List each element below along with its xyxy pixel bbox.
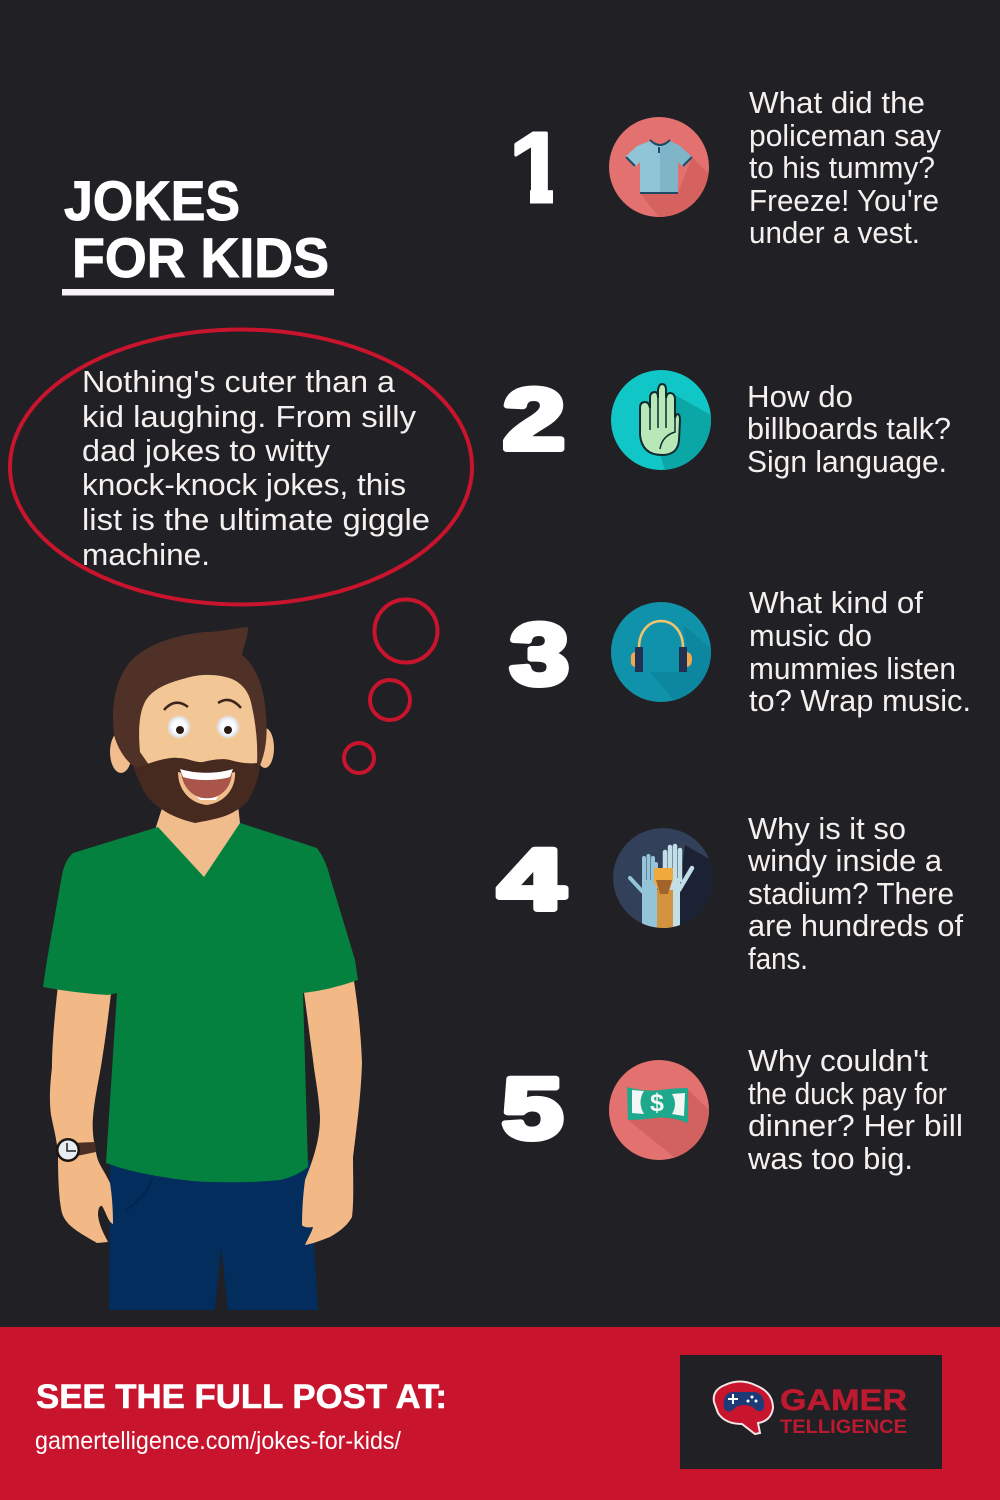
icon: raised hands [613, 828, 713, 928]
logo wordmark: GAMER [780, 1384, 907, 1417]
joke text 5: Why couldn't [748, 1043, 928, 1078]
joke text 4: are hundreds of [748, 908, 963, 943]
eyes [167, 715, 240, 739]
title: JOKES [64, 169, 240, 232]
joke text 1: policeman say [749, 118, 941, 153]
joke 5 [502, 1043, 963, 1176]
eyebrows [164, 700, 241, 710]
neck [155, 805, 241, 880]
footer url: gamertelligence.com/jokes-for-kids/ [35, 1427, 401, 1455]
joke text 4: stadium? There [748, 876, 954, 911]
joke text 2: Sign language. [747, 444, 947, 479]
joke text 2: How do [747, 379, 853, 414]
joke text 1: What did the [749, 85, 925, 120]
green shirt [43, 823, 358, 1182]
joke text 4: fans. [748, 941, 808, 976]
icon: dollar bill: $ [650, 1089, 664, 1117]
logo [680, 1355, 942, 1469]
joke text 5 [747, 1043, 963, 1176]
joke text 5: the duck pay for [748, 1076, 947, 1111]
number 1: 1 [509, 112, 565, 224]
joke 4 [498, 811, 963, 976]
hair [113, 627, 267, 770]
joke text 4: Why is it so [748, 811, 906, 846]
thought bubble with intro text: knock-knock jokes, this [82, 467, 406, 502]
joke text 3: to? Wrap music. [749, 683, 971, 718]
joke text 1: to his tummy? [749, 150, 935, 185]
thought bubble trail circles [344, 600, 438, 773]
ears [110, 728, 274, 773]
beard [133, 758, 260, 823]
face [139, 675, 257, 795]
number 2: 2 [503, 372, 565, 468]
wristwatch [56, 1138, 96, 1162]
joke text 5: dinner? Her bill [748, 1108, 963, 1143]
joke text 2: billboards talk? [747, 411, 951, 446]
mouth [178, 769, 235, 805]
thought bubble with intro text: kid laughing. From silly [82, 399, 417, 434]
thought bubble with intro text: Nothing's cuter than a [82, 364, 396, 399]
icon: headphones [611, 602, 711, 702]
title: FOR KIDS [72, 226, 329, 289]
joke text 3: What kind of [749, 585, 923, 620]
left arm [50, 985, 113, 1243]
joke text 5: was too big. [747, 1141, 913, 1176]
thought bubble with intro text: machine. [82, 537, 210, 572]
illustration: laughing man [43, 627, 362, 1310]
joke 2 [503, 370, 951, 480]
thought bubble with intro text [10, 330, 472, 604]
icon: raised hand [611, 370, 711, 470]
number 4: 4 [498, 832, 565, 928]
thought bubble with intro text: dad jokes to witty [82, 433, 331, 468]
number 3: 3 [510, 607, 569, 703]
logo icon: brain with gamepad [714, 1382, 773, 1434]
joke text 4 [747, 811, 963, 976]
joke text 1: Freeze! You're [749, 183, 939, 218]
joke text 1: under a vest. [749, 215, 920, 250]
icon: dollar bill [609, 1060, 709, 1160]
joke text 1 [749, 85, 941, 250]
footer banner [0, 1327, 1000, 1500]
jeans [109, 1160, 318, 1310]
title [62, 169, 334, 296]
joke text 4: windy inside a [747, 843, 943, 878]
joke text 3 [749, 585, 971, 718]
joke 1 [509, 85, 941, 250]
number 5: 5 [502, 1061, 563, 1157]
joke text 3: music do [749, 618, 872, 653]
joke text 3: mummies listen [749, 651, 956, 686]
joke text 2 [747, 379, 951, 479]
footer heading: SEE THE FULL POST AT: [36, 1378, 447, 1416]
thought bubble with intro text: list is the ultimate giggle [82, 502, 430, 537]
right arm [302, 975, 362, 1245]
logo: TELLIGENCE [780, 1417, 907, 1438]
icon: t-shirt [609, 117, 709, 217]
joke 3 [510, 585, 971, 720]
